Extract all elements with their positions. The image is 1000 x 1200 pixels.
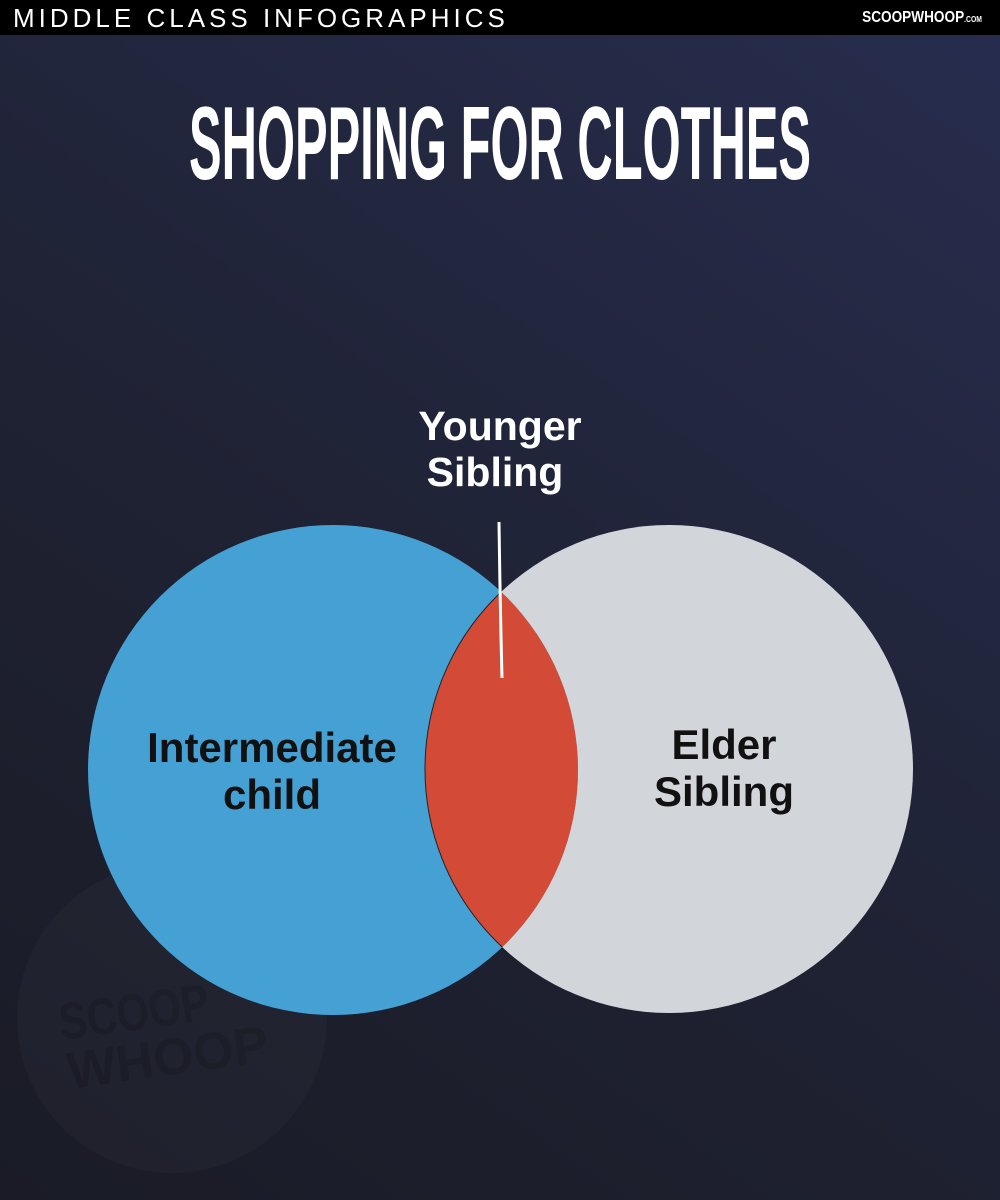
label: elder sibling: Sibling [654, 768, 794, 815]
label: younger sibling: Younger [418, 403, 582, 449]
title: SHOPPING FOR CLOTHES [189, 86, 811, 202]
label: intermediate child: Intermediate [147, 724, 397, 771]
intersection: younger sibling [424, 592, 578, 948]
circle: elder sibling [425, 525, 913, 1013]
header bar [0, 0, 1000, 35]
label: intermediate child: child [223, 771, 321, 818]
watermark: WHOOP [63, 1015, 272, 1101]
brand logo: SCOOPWHOOP.COM [862, 9, 982, 26]
watermark: SCOOP [55, 972, 212, 1051]
label: elder sibling: Elder [671, 721, 777, 768]
venn diagram [88, 412, 913, 1015]
label: younger sibling: Sibling [427, 449, 563, 495]
pointer line [499, 522, 502, 678]
circle: intermediate child [88, 525, 578, 1015]
watermark [17, 863, 327, 1173]
header text: MIDDLE CLASS INFOGRAPHICS [13, 3, 509, 33]
